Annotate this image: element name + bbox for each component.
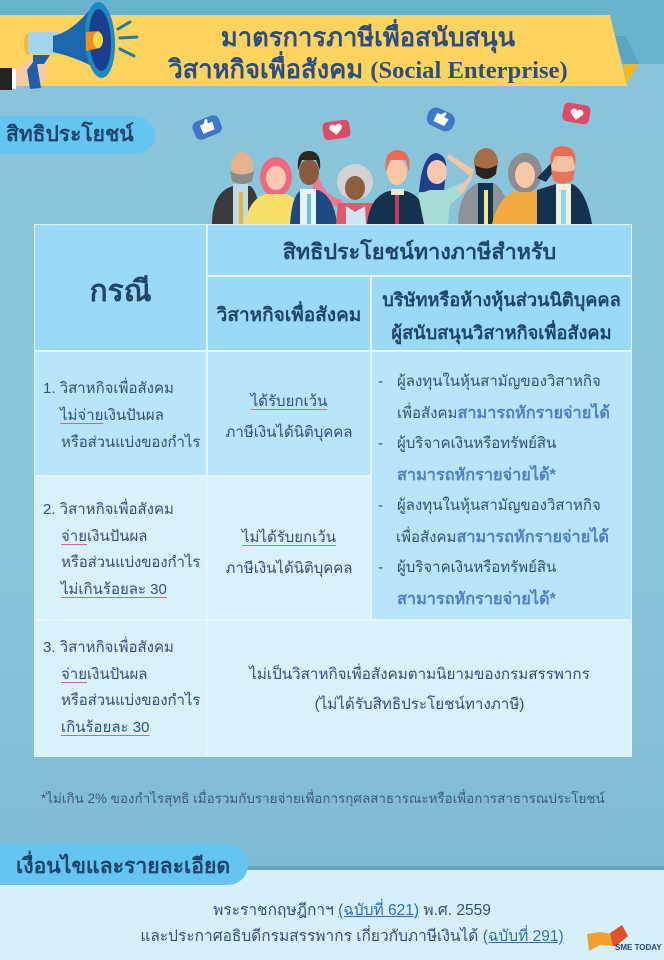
case 1 <box>34 351 207 476</box>
case 1 text: หรือส่วนแบ่งของกำไร <box>61 434 200 451</box>
case 3 text: 3. วิสาหกิจเพื่อสังคม <box>43 639 174 656</box>
heading: สิทธิประโยชน์: สิทธิประโยชน์ <box>6 123 134 146</box>
table <box>34 224 632 757</box>
case 1 text <box>43 378 200 451</box>
header cell: สิทธิประโยชน์ทางภาษีสำหรับ: สิทธิประโยชน์ทางภาษีสำหรับ <box>283 239 556 264</box>
conditions text: พระราชกฤษฎีกาฯ (ฉบับที่ 621) พ.ศ. 2559 <box>213 902 491 919</box>
supporter benefits text: ผู้ลงทุนในหุ้นสามัญของวิสาหกิจ <box>397 373 601 390</box>
supporter benefits text: - <box>378 559 383 576</box>
case 1 benefit <box>207 351 371 476</box>
case 3 result: (ไม่ได้รับสิทธิประโยชน์ทางภาษี) <box>315 696 524 713</box>
case 3 result: ไม่เป็นวิสาหกิจเพื่อสังคมตามนิยามของกรมสรรพากร <box>249 666 590 683</box>
case 2 text <box>43 498 200 598</box>
supporter benefits text: สามารถหักรายจ่ายได้* <box>397 590 556 608</box>
header cell: บริษัทหรือห้างหุ้นส่วนนิติบุคคล <box>371 276 632 351</box>
heading: เงื่อนไขและรายละเอียด <box>0 844 248 885</box>
heading: เงื่อนไขและรายละเอียด: เงื่อนไขและรายละเอียด <box>16 855 230 878</box>
supporter benefits text: เพื่อสังคมสามารถหักรายจ่ายได้ <box>397 404 610 422</box>
header cell: บริษัทหรือห้างหุ้นส่วนนิติบุคคล: บริษัทหรือห้างหุ้นส่วนนิติบุคคล <box>382 290 621 310</box>
case 1 text: ไม่จ่ายเงินปันผล <box>60 407 164 424</box>
case 3 text: จ่ายเงินปันผล <box>61 666 147 683</box>
header cell: สิทธิประโยชน์ทางภาษีสำหรับ <box>207 224 632 276</box>
case 2 benefit: ไม่ได้รับยกเว้น <box>242 528 336 546</box>
case 1 benefit: ภาษีเงินได้นิติบุคคล <box>226 424 352 440</box>
footnote: *ไม่เกิน 2% ของกำไรสุทธิ เมื่อรวมกับรายจ่ายเพื่อการกุศลสาธารณะหรือเพื่อการสาธารณประโยชน์ <box>41 791 605 806</box>
top banner background <box>0 0 664 64</box>
supporter benefits text: - <box>378 373 383 390</box>
header cell: กรณี <box>34 224 207 351</box>
supporter benefits text: ผู้ลงทุนในหุ้นสามัญของวิสาหกิจ <box>397 497 601 514</box>
icon: like and heart badges <box>192 102 590 140</box>
case 3 <box>34 620 207 757</box>
conditions text: และประกาศอธิบดีกรมสรรพากร เกี่ยวกับภาษีเงินได้ (ฉบับที่ 291) <box>140 928 564 945</box>
case 2 text: ไม่เกินร้อยละ 30 <box>61 581 167 598</box>
supporter benefits <box>371 351 632 620</box>
logo: SME Today: SME TODAY <box>615 943 662 952</box>
illustration: group of people <box>212 146 592 224</box>
case 2 benefit: ภาษีเงินได้นิติบุคคล <box>226 560 352 576</box>
heading: สิทธิประโยชน์ <box>0 116 155 154</box>
case 3 text: เกินร้อยละ 30 <box>61 719 149 736</box>
title: วิสาหกิจเพื่อสังคม (Social Enterprise) <box>168 56 568 84</box>
supporter benefits text <box>378 372 610 608</box>
logo: SME Today <box>587 925 662 952</box>
supporter benefits text: - <box>378 497 383 514</box>
header cell: กรณี: กรณี <box>89 275 152 308</box>
conditions section background <box>0 866 664 960</box>
supporter benefits text: - <box>378 435 383 452</box>
supporter benefits text: ผู้บริจาคเงินหรือทรัพย์สิน <box>397 435 556 452</box>
title ribbon <box>0 15 639 86</box>
case 3 text: หรือส่วนแบ่งของกำไร <box>61 692 200 709</box>
case 1 text: 1. วิสาหกิจเพื่อสังคม <box>43 380 174 397</box>
case 2 text: จ่ายเงินปันผล <box>61 528 147 545</box>
conditions text <box>140 899 564 945</box>
case 2 text: 2. วิสาหกิจเพื่อสังคม <box>43 501 174 518</box>
supporter benefits text: สามารถหักรายจ่ายได้* <box>397 466 556 484</box>
case 2 benefit <box>207 476 371 620</box>
header cell: วิสาหกิจเพื่อสังคม: วิสาหกิจเพื่อสังคม <box>217 304 361 326</box>
header cell: บริษัทหรือห้างหุ้นส่วนนิติบุคคล: ผู้สนับสนุนวิสาหกิจเพื่อสังคม <box>391 322 612 342</box>
header cell: วิสาหกิจเพื่อสังคม <box>207 276 371 351</box>
case 2 text: หรือส่วนแบ่งของกำไร <box>61 554 200 571</box>
supporter benefits text: เพื่อสังคมสามารถหักรายจ่ายได้ <box>396 528 609 546</box>
icon: megaphone in hand <box>0 2 138 90</box>
title <box>168 19 568 84</box>
case 3 result <box>207 620 632 757</box>
supporter benefits text: ผู้บริจาคเงินหรือทรัพย์สิน <box>397 559 556 576</box>
title: มาตรการภาษีเพื่อสนับสนุน <box>221 24 515 52</box>
case 2 <box>34 476 207 620</box>
case 1 benefit: ได้รับยกเว้น <box>251 392 327 410</box>
case 3 text <box>43 636 200 736</box>
